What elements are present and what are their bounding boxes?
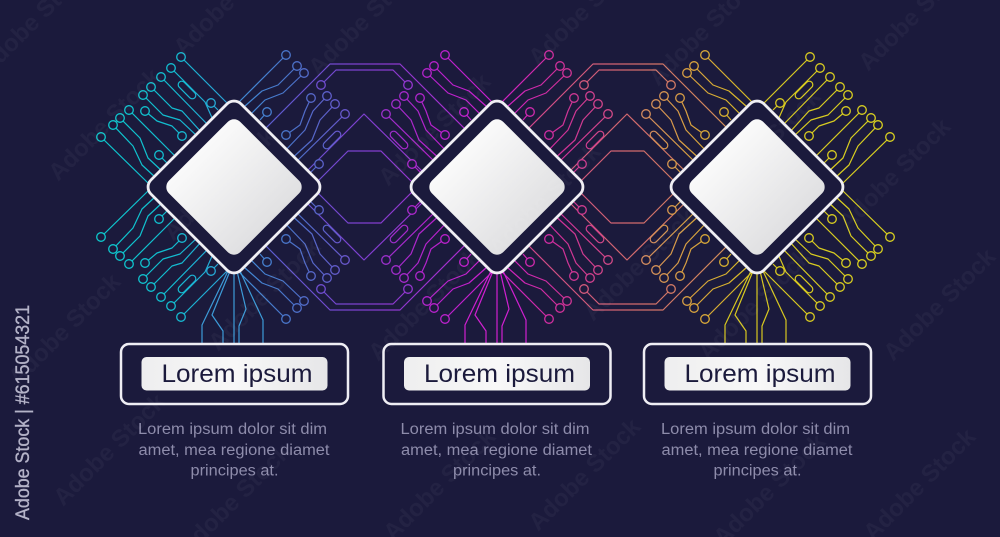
chip 1 diamond bbox=[144, 97, 324, 277]
stock watermarks: Adobe Stock bbox=[693, 243, 817, 366]
description text 2: principes at. bbox=[453, 462, 541, 480]
circuit: chip 1 traces bbox=[97, 51, 349, 344]
circuit: chip 2 traces bbox=[382, 51, 612, 344]
chip 3 diamond bbox=[667, 97, 847, 277]
stock watermarks: Adobe Stock bbox=[203, 233, 327, 356]
stock watermarks: Adobe Stock bbox=[578, 203, 702, 326]
description text 1: principes at. bbox=[190, 462, 278, 480]
circuit connector between chips 2 and 3 bbox=[526, 64, 729, 310]
label box 2: Lorem ipsum bbox=[424, 360, 575, 388]
description text 1: Lorem ipsum dolor sit dim bbox=[138, 421, 327, 438]
circuit: chip 3 traces bbox=[642, 51, 894, 344]
label box 3: Lorem ipsum bbox=[684, 360, 836, 388]
stock watermarks: Adobe Stock bbox=[43, 63, 167, 186]
stock watermarks: Adobe Stock bbox=[833, 113, 957, 236]
stock watermarks: Adobe Stock bbox=[158, 123, 282, 246]
chip 2 diamond bbox=[407, 97, 587, 277]
description text 2: amet, mea regione diamet bbox=[401, 442, 593, 459]
side credit: Adobe Stock | #615054321 bbox=[13, 305, 34, 520]
description text 3: principes at. bbox=[714, 462, 802, 480]
label box 1: Lorem ipsum bbox=[162, 360, 312, 388]
stock watermarks: Adobe Stock bbox=[523, 413, 647, 536]
stock watermarks: Adobe Stock bbox=[878, 243, 1000, 366]
label box 3 bbox=[644, 344, 871, 404]
stock watermarks: Adobe Stock bbox=[703, 83, 827, 206]
stock watermarks: Adobe Stock bbox=[373, 68, 497, 191]
stock watermarks: Adobe Stock bbox=[363, 243, 487, 366]
description text 3: amet, mea regione diamet bbox=[662, 442, 853, 459]
description text 2 bbox=[400, 421, 593, 480]
stock watermarks: Adobe Stock bbox=[48, 388, 172, 511]
description text 1: amet, mea regione diamet bbox=[138, 442, 330, 459]
description text 2: Lorem ipsum dolor sit dim bbox=[400, 421, 590, 438]
stock watermarks: Adobe Stock bbox=[3, 268, 127, 391]
description text 1 bbox=[138, 421, 330, 480]
stock watermarks: Adobe Stock bbox=[483, 138, 607, 261]
circuit connector between chips 1 and 2 bbox=[263, 64, 466, 310]
description text 3: Lorem ipsum dolor sit dim bbox=[661, 421, 850, 438]
label box 1 bbox=[121, 344, 348, 404]
description text 3 bbox=[661, 421, 853, 480]
label box 2 bbox=[384, 344, 610, 404]
